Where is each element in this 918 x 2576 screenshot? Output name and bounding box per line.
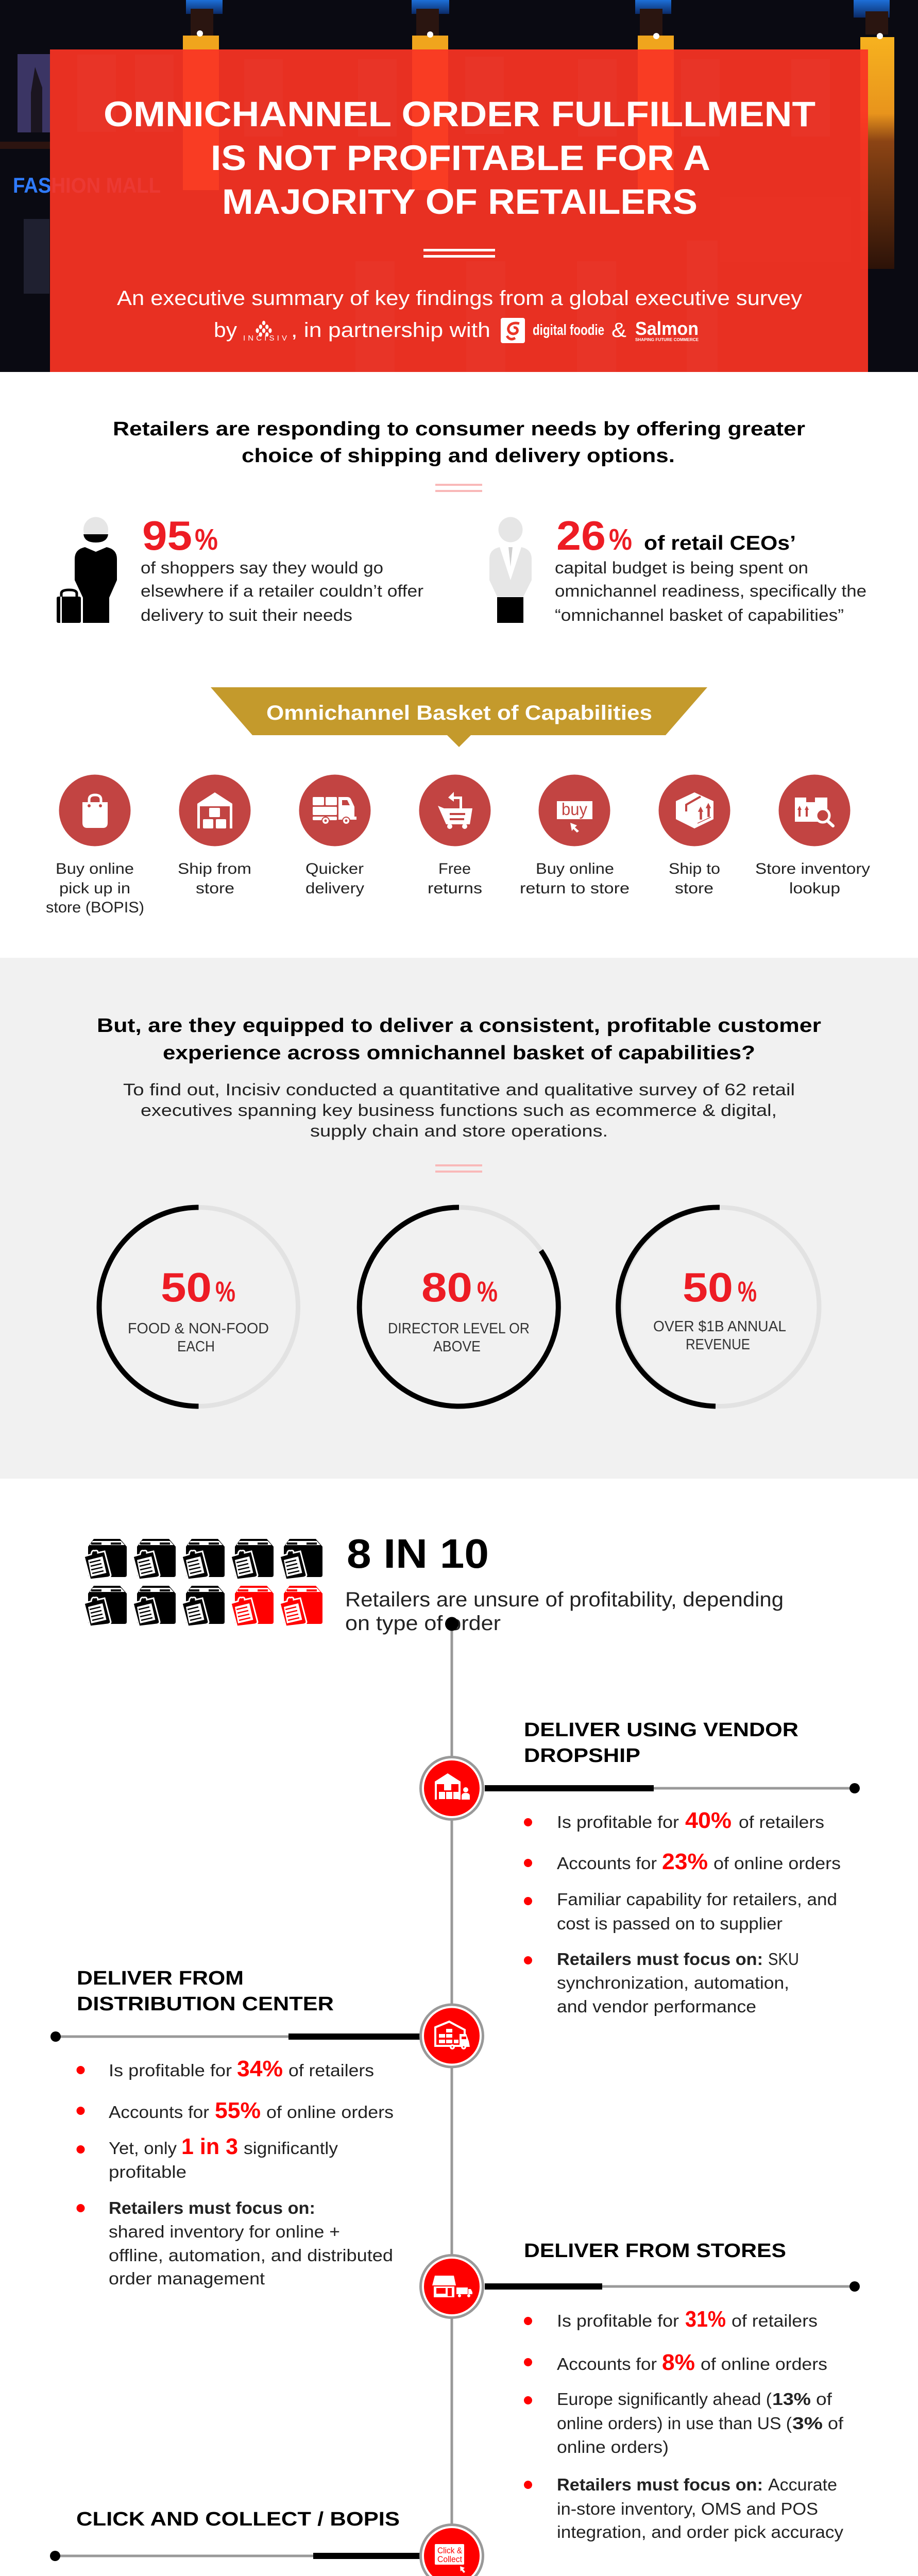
stat: 8 in 10: on type of order bbox=[345, 1612, 501, 1635]
bullet list: 55% bbox=[215, 2098, 261, 2123]
logo: Salmon: SHAPING FUTURE COMMERCE bbox=[635, 337, 699, 342]
donut: 50 percent food and non-food: 50 bbox=[161, 1264, 212, 1310]
stat: 26 percent of retail CEOs: capital budget is being spent on bbox=[555, 558, 808, 577]
stat: 95 percent of shoppers: % bbox=[195, 523, 218, 556]
subtitle: by bbox=[214, 319, 237, 342]
capability: buy online return to store bbox=[520, 775, 630, 897]
bullet list: Accurate bbox=[768, 2475, 837, 2494]
banner: omnichannel basket of capabilities: Omnichannel Basket of Capabilities bbox=[266, 702, 652, 724]
heading: DISTRIBUTION CENTER bbox=[77, 1993, 334, 2015]
logo: Salmon: Salmon bbox=[635, 318, 699, 339]
bullet list: in-store inventory, OMS and POS bbox=[557, 2499, 818, 2518]
node: distribution center bbox=[50, 1968, 483, 2288]
capability: quicker delivery: delivery bbox=[305, 880, 364, 897]
bullet list: Yet, only bbox=[109, 2139, 177, 2158]
bullet list: of retailers bbox=[288, 2061, 374, 2080]
bullet list: and vendor performance bbox=[557, 1997, 756, 2016]
bullet list: of retailers bbox=[732, 2311, 818, 2330]
hero divider bbox=[423, 249, 495, 258]
bullet list: Retailers must focus on: bbox=[109, 2198, 315, 2217]
capability: ship from store: store bbox=[196, 880, 234, 897]
survey description: supply chain and store operations. bbox=[310, 1122, 608, 1140]
bullet list: 8% bbox=[662, 2350, 695, 2375]
donut: 80 percent director level: 80 bbox=[421, 1264, 472, 1310]
logo: Incisiv: INCISIV bbox=[243, 334, 287, 343]
subtitle: & bbox=[611, 319, 626, 342]
donut: 80 percent director level: ABOVE bbox=[433, 1338, 481, 1355]
subtitle bbox=[117, 287, 802, 342]
bullet list: Europe significantly ahead ( bbox=[557, 2389, 772, 2409]
survey heading: experience across omnichannel basket of capabilities? bbox=[163, 1042, 755, 1064]
bullet list: significantly bbox=[244, 2139, 338, 2158]
bullet list: of bbox=[816, 2389, 832, 2409]
bullet list: 23% bbox=[662, 1849, 708, 1874]
donut: 50 percent over 1B revenue bbox=[618, 1207, 819, 1406]
capability: free returns: Free bbox=[438, 860, 471, 877]
bullet list: integration, and order pick accuracy bbox=[557, 2522, 844, 2541]
heading: DELIVER FROM STORES bbox=[524, 2240, 786, 2262]
icon: warehouse with person bbox=[435, 1773, 470, 1800]
stat: 95 percent of shoppers: delivery to suit their needs bbox=[141, 606, 352, 624]
donut: 50 percent food and non-food bbox=[99, 1208, 298, 1406]
bullet list: of online orders bbox=[701, 2354, 827, 2374]
icon: warehouse and delivery truck bbox=[434, 2022, 470, 2049]
donut: 80 percent director level: % bbox=[477, 1275, 498, 1308]
panel: survey bbox=[0, 958, 918, 1479]
icon: click and collect button: Click & bbox=[437, 2546, 463, 2555]
title: MAJORITY OF RETAILERS bbox=[222, 182, 698, 222]
capability: free returns bbox=[419, 775, 490, 897]
stat: 26 percent of retail CEOs: 26 bbox=[556, 513, 606, 558]
bullet list: Is profitable for bbox=[109, 2061, 232, 2080]
bullet list: online orders) in use than US ( bbox=[557, 2414, 792, 2433]
icon: click and collect button bbox=[435, 2544, 465, 2573]
donut: 50 percent food and non-food: % bbox=[215, 1275, 235, 1308]
bullet list: 13% bbox=[772, 2389, 811, 2409]
bullet list: online orders) bbox=[557, 2437, 669, 2456]
bullet list: synchronization, automation, bbox=[557, 1973, 789, 1992]
hero background photo: FASHION MALL bbox=[13, 173, 161, 197]
bullet list: of online orders bbox=[713, 1854, 841, 1873]
donut: 50 percent food and non-food: EACH bbox=[177, 1338, 215, 1355]
capability: store inventory lookup: lookup bbox=[789, 880, 840, 897]
bullet list: 1 in 3 bbox=[181, 2134, 238, 2159]
donut: 50 percent food and non-food: FOOD & NON-FOOD bbox=[128, 1320, 269, 1337]
section heading: consumer needs: choice of shipping and delivery options. bbox=[242, 445, 675, 467]
stat: 8 in 10 bbox=[345, 1531, 784, 1635]
capability: buy online pick up in store: pick up in bbox=[59, 880, 130, 897]
bullet list bbox=[524, 1808, 841, 2016]
capability: ship to store: Ship to bbox=[669, 860, 720, 877]
donut: 80 percent director level bbox=[360, 1207, 558, 1406]
capability: buy online pick up in store: store (BOPIS) bbox=[46, 899, 144, 916]
bullet list: Accounts for bbox=[557, 1854, 657, 1873]
bullet list: 34% bbox=[237, 2056, 283, 2081]
bullet list: order management bbox=[109, 2269, 265, 2288]
bullet list: Is profitable for bbox=[557, 2311, 679, 2330]
bullet list: of retailers bbox=[739, 1812, 824, 1832]
capability: buy online return to store: return to store bbox=[520, 880, 630, 897]
capability: quicker delivery bbox=[299, 775, 371, 897]
donut: 80 percent director level: DIRECTOR LEVEL OR bbox=[388, 1320, 530, 1337]
node: vendor dropship bbox=[420, 1719, 860, 2016]
stat: 26 percent of retail CEOs: % bbox=[609, 523, 632, 556]
stat: 26 percent of retail CEOs: omnichannel readiness, specifically the bbox=[555, 582, 866, 600]
bullet list: cost is passed on to supplier bbox=[557, 1914, 783, 1933]
heading: DROPSHIP bbox=[524, 1745, 640, 1767]
survey description: To find out, Incisiv conducted a quantitative and qualitative survey of 62 retail bbox=[123, 1080, 795, 1099]
heading bbox=[524, 1719, 798, 1767]
subtitle: , in partnership with bbox=[291, 319, 490, 342]
stat: 95 percent of shoppers: 95 bbox=[142, 513, 192, 558]
icon: storefront and truck bbox=[432, 2276, 472, 2297]
bullet list: profitable bbox=[109, 2162, 186, 2181]
capability: ship to store bbox=[658, 775, 730, 897]
survey description: executives spanning key business functions such as ecommerce & digital, bbox=[141, 1101, 777, 1120]
survey description bbox=[123, 1080, 795, 1140]
node: stores bbox=[420, 2240, 860, 2541]
stat: 95 percent of shoppers bbox=[141, 513, 423, 624]
capability: ship to store: store bbox=[675, 880, 713, 897]
heading bbox=[77, 1968, 334, 2015]
donut: 50 percent over 1B revenue: OVER $1B ANNUAL bbox=[653, 1318, 786, 1335]
stat: 26 percent of retail CEOs bbox=[555, 513, 866, 624]
bullet list: Retailers must focus on: bbox=[557, 2475, 763, 2494]
stat: 26 percent of retail CEOs: of retail CEOs’ bbox=[644, 532, 796, 554]
capability: ship from store: Ship from bbox=[178, 860, 251, 877]
stat: 8 in 10: Retailers are unsure of profitability, depending bbox=[345, 1588, 784, 1611]
donut: 50 percent over 1B revenue: % bbox=[738, 1275, 757, 1308]
bullet list bbox=[524, 2307, 844, 2541]
section heading: consumer needs: Retailers are responding to consumer needs by offering greater bbox=[113, 418, 805, 440]
stat: 95 percent of shoppers: of shoppers say they would go bbox=[141, 558, 383, 577]
bullet list: SKU bbox=[768, 1950, 799, 1969]
bullet list: 3% bbox=[792, 2414, 823, 2433]
bullet list: Accounts for bbox=[109, 2103, 209, 2122]
bullet list: 40% bbox=[685, 1808, 732, 1833]
title: IS NOT PROFITABLE FOR A bbox=[211, 138, 710, 178]
bullet list: offline, automation, and distributed bbox=[109, 2246, 393, 2265]
donut: 50 percent over 1B revenue: REVENUE bbox=[686, 1336, 750, 1353]
bullet list: of online orders bbox=[266, 2103, 394, 2122]
bullet list: shared inventory for online + bbox=[109, 2222, 340, 2241]
node: click and collect bbox=[50, 2509, 483, 2576]
survey heading: But, are they equipped to deliver a consistent, profitable customer bbox=[97, 1015, 821, 1037]
capability: buy online return to store: Buy online bbox=[536, 860, 614, 877]
survey heading bbox=[97, 1015, 821, 1064]
capability: buy online pick up in store: Buy online bbox=[56, 860, 134, 877]
donut: 50 percent over 1B revenue: 50 bbox=[683, 1264, 733, 1310]
logo: digital foodie bbox=[501, 318, 604, 343]
heading: CLICK AND COLLECT / BOPIS bbox=[76, 2509, 400, 2530]
bullet list: Accounts for bbox=[557, 2354, 657, 2374]
title bbox=[104, 94, 815, 222]
banner: omnichannel basket of capabilities bbox=[211, 687, 707, 747]
capability: buy online pick up in store bbox=[46, 775, 144, 916]
title: OMNICHANNEL ORDER FULFILLMENT bbox=[104, 94, 815, 134]
hero background photo bbox=[0, 0, 918, 372]
stat: 95 percent of shoppers: elsewhere if a retailer couldn’t offer bbox=[141, 582, 423, 600]
bullet list: Retailers must focus on: bbox=[557, 1950, 763, 1969]
bullet list: 31% bbox=[685, 2307, 726, 2332]
bullet list: of bbox=[828, 2414, 844, 2433]
timeline spine bbox=[445, 1617, 458, 2576]
capability: store inventory lookup: Store inventory bbox=[755, 860, 870, 877]
capability: quicker delivery: Quicker bbox=[305, 860, 364, 877]
bullet list: Is profitable for bbox=[557, 1812, 679, 1832]
capability: buy online return to store: buy bbox=[562, 800, 587, 819]
icon: CEO bbox=[489, 517, 532, 623]
stat: 8 in 10: 8 IN 10 bbox=[347, 1531, 489, 1577]
subtitle: An executive summary of key findings from a global executive survey bbox=[117, 287, 802, 310]
pictogram: 8 in 10 boxes bbox=[84, 1539, 322, 1626]
capability: ship from store bbox=[178, 775, 251, 897]
bullet list bbox=[76, 2056, 394, 2288]
logo: digital foodie: digital foodie bbox=[533, 322, 604, 338]
section heading: consumer needs bbox=[113, 418, 805, 467]
icon: delivery person bbox=[57, 517, 117, 623]
hero red panel bbox=[50, 49, 868, 372]
capability: free returns: returns bbox=[428, 880, 482, 897]
heading: DELIVER FROM bbox=[77, 1968, 244, 1989]
logo: Incisiv bbox=[243, 320, 287, 343]
icon: click and collect button: Collect bbox=[437, 2554, 462, 2564]
heading: DELIVER USING VENDOR bbox=[524, 1719, 798, 1741]
capability: store inventory lookup bbox=[755, 775, 870, 897]
bullet list: Familiar capability for retailers, and bbox=[557, 1890, 837, 1909]
stat: 26 percent of retail CEOs: “omnichannel basket of capabilities” bbox=[555, 606, 844, 624]
